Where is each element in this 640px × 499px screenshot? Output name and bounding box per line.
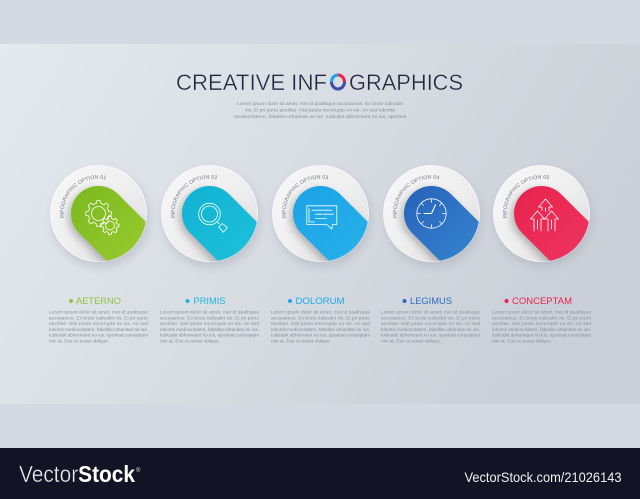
icon: clock (417, 199, 446, 228)
column 02: PRIMIS: lobortis mediocritatem, fabellas urbanitas ne ius. (160, 327, 259, 332)
column 01: AETERNO (49, 296, 148, 344)
panel: option 05 disc: INFOGRAPHIC OPTION 05 (502, 175, 550, 218)
column 04: LEGIMUS: nim at. Eos cu sonet oblique. (381, 338, 441, 344)
column 03: DOLORUM: Iudicabit abhorreant no ius, oporteat conceptam (271, 333, 370, 338)
column 01: AETERNO: AETERNO (76, 296, 121, 306)
panel: option 04 disc: INFOGRAPHIC OPTION 04 (392, 175, 439, 218)
column 02: PRIMIS: PRIMIS (194, 296, 226, 306)
panel: option 03 disc (272, 165, 372, 268)
column 05: CONCEPTAM: CONCEPTAM (512, 296, 572, 306)
column 04: LEGIMUS: Lorem ipsum dolor sit amet, mei id qualisque (381, 310, 480, 314)
column 01: AETERNO: ancillae. Nisl paulo incorrupte no vis. An sed (49, 321, 148, 326)
subtitle text: vis. Ei pri purto ancillae. Nisl paulo incorrupte no vis. An sed lobortis (245, 108, 396, 112)
column 05: CONCEPTAM: lobortis mediocritatem, fabellas urbanitas ne ius. (492, 327, 591, 332)
panel: option 05 disc (493, 165, 593, 268)
panel: option 02 disc (160, 165, 262, 269)
column 03: DOLORUM: ancillae. Nisl paulo incorrupte no vis. An sed (271, 321, 370, 326)
footer logo: VectorStock (19, 461, 135, 487)
icon: gears (86, 201, 119, 234)
column 01: AETERNO: lobortis mediocritatem, fabellas urbanitas ne ius. (49, 327, 148, 332)
subtitle text (234, 101, 407, 119)
column 03: DOLORUM: lobortis mediocritatem, fabellas urbanitas ne ius. (271, 327, 370, 332)
column 05: CONCEPTAM (492, 296, 591, 344)
column 02: PRIMIS: nim at. Eos cu sonet oblique. (160, 338, 220, 344)
column 04: LEGIMUS: ancillae. Nisl paulo incorrupte no vis. An sed (381, 321, 480, 326)
column 01: AETERNO: Lorem ipsum dolor sit amet, mei id qualisque (49, 310, 148, 314)
column 03: DOLORUM: DOLORUM (296, 296, 344, 306)
title: GRAPHICS (349, 70, 463, 95)
column 03: DOLORUM (271, 296, 370, 344)
column 03: DOLORUM: Lorem ipsum dolor sit amet, mei id qualisque (271, 310, 370, 314)
column 03: DOLORUM: nim at. Eos cu sonet oblique. (271, 338, 331, 344)
column 02: PRIMIS (160, 296, 259, 344)
column 01: AETERNO: nim at. Eos cu sonet oblique. (49, 338, 109, 344)
panel: option 02 disc: INFOGRAPHIC OPTION 02 (170, 175, 218, 218)
registered mark: ® (136, 467, 141, 474)
column 05: CONCEPTAM: ancillae. Nisl paulo incorrupte no vis. An sed (492, 321, 591, 326)
column 04: LEGIMUS: LEGIMUS (410, 296, 452, 306)
column 05: CONCEPTAM: nim at. Eos cu sonet oblique. (492, 338, 552, 344)
column 05: CONCEPTAM: Lorem ipsum dolor sit amet, mei id qualisque (492, 310, 591, 314)
panel: option 01 disc: INFOGRAPHIC OPTION 01 (60, 175, 106, 218)
column 04: LEGIMUS: accusamus. Ex brute iudicabit vis. Ei pri purto (381, 315, 480, 320)
column 04: LEGIMUS: lobortis mediocritatem, fabellas urbanitas ne ius. (381, 327, 480, 332)
subtitle text: Lorem ipsum dolor sit amet, mei id qualisque accusamus. Ex brute iudicabit (237, 101, 404, 106)
column 02: PRIMIS: Iudicabit abhorreant no ius, oporteat conceptam (160, 333, 259, 338)
column 04: LEGIMUS: Iudicabit abhorreant no ius, oporteat conceptam (381, 333, 480, 338)
panel: option 03 disc: INFOGRAPHIC OPTION 03 (282, 175, 328, 218)
icon: chat bubble (307, 206, 337, 229)
icon: colored title ring letter O (332, 75, 344, 89)
column 03: DOLORUM: accusamus. Ex brute iudicabit vis. Ei pri purto (271, 315, 370, 320)
title: CREATIVE INF (176, 70, 327, 95)
panel: option 01 disc (50, 165, 152, 270)
footer bar (0, 448, 640, 499)
column 04: LEGIMUS (381, 296, 480, 344)
panel: option 04 disc (383, 165, 484, 268)
column 05: CONCEPTAM: accusamus. Ex brute iudicabit vis. Ei pri purto (492, 315, 591, 320)
column 05: CONCEPTAM: Iudicabit abhorreant no ius, oporteat conceptam (492, 333, 591, 338)
icon: magnifier (199, 203, 227, 232)
column 01: AETERNO: accusamus. Ex brute iudicabit vis. Ei pri purto (49, 315, 148, 320)
subtitle text: mediocritatem, fabellas urbanitas ne ius. Iudicabit abhorreant no ius, oporteat (234, 114, 407, 119)
footer url: VectorStock.com/21026143 (464, 469, 622, 485)
icon: rising arrows (530, 199, 558, 231)
background panel (0, 44, 640, 404)
column 01: AETERNO: Iudicabit abhorreant no ius, oporteat conceptam (49, 333, 148, 338)
column 02: PRIMIS: ancillae. Nisl paulo incorrupte no vis. An sed (160, 321, 259, 326)
title (176, 70, 463, 95)
column 02: PRIMIS: accusamus. Ex brute iudicabit vis. Ei pri purto (160, 315, 259, 320)
column 02: PRIMIS: Lorem ipsum dolor sit amet, mei id qualisque (160, 310, 259, 314)
